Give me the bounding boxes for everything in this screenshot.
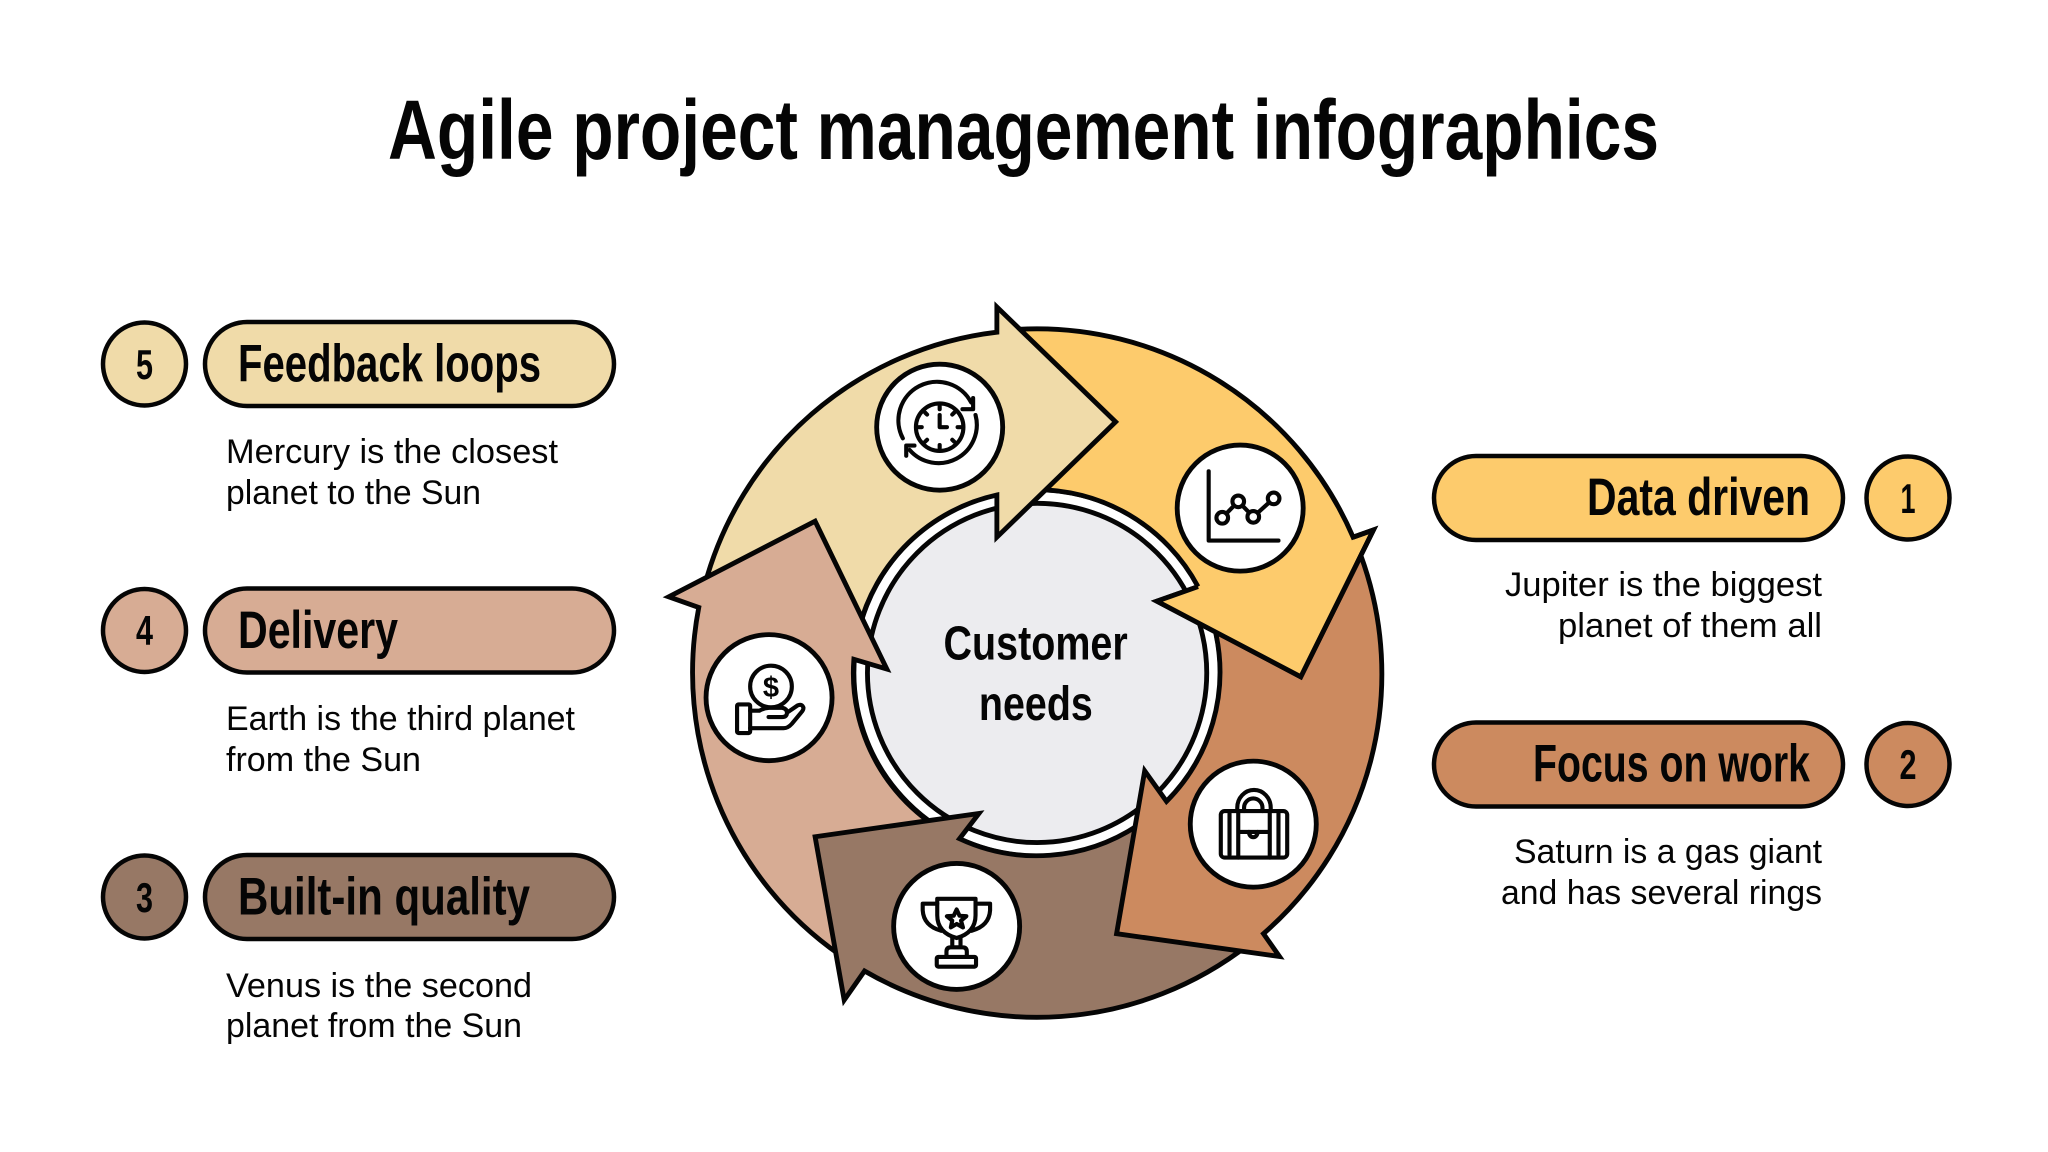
description: focus on work: Saturn is a gas giant: [1514, 833, 1823, 871]
number badge 5: 5: [136, 341, 153, 388]
label pill: delivery: [205, 588, 614, 672]
icon: briefcase: [1190, 761, 1316, 887]
center circle: customer needs: needs: [979, 677, 1093, 731]
description: data driven: planet of them all: [1558, 607, 1822, 645]
icon: line chart: [1177, 445, 1303, 571]
arrow 1: data driven: [1019, 329, 1373, 677]
label pill: built-in quality: [205, 855, 614, 939]
description: delivery: Earth is the third planet: [226, 700, 576, 738]
icon: hand holding coin: [706, 635, 832, 761]
label pill: built-in quality: Built-in quality: [238, 868, 530, 926]
icon: trophy with star: [894, 863, 1020, 989]
label pill: feedback loops: Feedback loops: [238, 334, 541, 394]
label pill: focus on work: Focus on work: [1533, 734, 1810, 794]
number badge 1: [1866, 456, 1950, 540]
item 2: focus on work: [1434, 722, 1950, 912]
item 4: delivery: [103, 588, 614, 779]
number badge 4: 4: [136, 607, 153, 654]
label pill: feedback loops: [205, 322, 614, 406]
number badge 2: [1866, 723, 1950, 806]
item 5: feedback loops: [103, 322, 614, 512]
item 1: data driven: [1434, 456, 1950, 645]
title: Agile project management infographics: [388, 83, 1659, 177]
label pill: delivery: Delivery: [238, 601, 398, 660]
label pill: data driven: Data driven: [1587, 468, 1810, 527]
description: feedback loops: Mercury is the closest: [226, 433, 559, 471]
description: delivery: from the Sun: [226, 741, 421, 779]
number badge 3: 3: [136, 874, 153, 921]
icon: clock with cycle arrows: [877, 364, 1003, 490]
description: built-in quality: Venus is the second: [226, 967, 532, 1005]
arrow 3: built-in quality: [815, 813, 1249, 1017]
item 3: built-in quality: [103, 855, 614, 1045]
description: feedback loops: planet to the Sun: [226, 474, 481, 512]
center circle: customer needs: Customer: [944, 616, 1128, 670]
arrow 2: focus on work: [1117, 556, 1382, 956]
label pill: data driven: [1434, 456, 1843, 540]
number badge 3: [103, 856, 186, 938]
icon: hand holding coin: $: [763, 672, 779, 704]
description: focus on work: and has several rings: [1501, 874, 1822, 912]
center circle: customer needs: [854, 490, 1220, 856]
description: built-in quality: planet from the Sun: [226, 1007, 522, 1045]
arrow 5: feedback loops: [705, 307, 1116, 629]
arrow 1 head overlap: [1157, 530, 1373, 677]
label pill: focus on work: [1434, 722, 1843, 806]
cycle diagram: [669, 307, 1382, 1017]
number badge 5: [103, 322, 186, 406]
number badge 4: [103, 589, 186, 672]
number badge 1: 1: [1900, 475, 1916, 522]
description: data driven: Jupiter is the biggest: [1505, 566, 1823, 604]
number badge 2: 2: [1900, 741, 1916, 788]
arrow 4: delivery: [669, 521, 956, 955]
